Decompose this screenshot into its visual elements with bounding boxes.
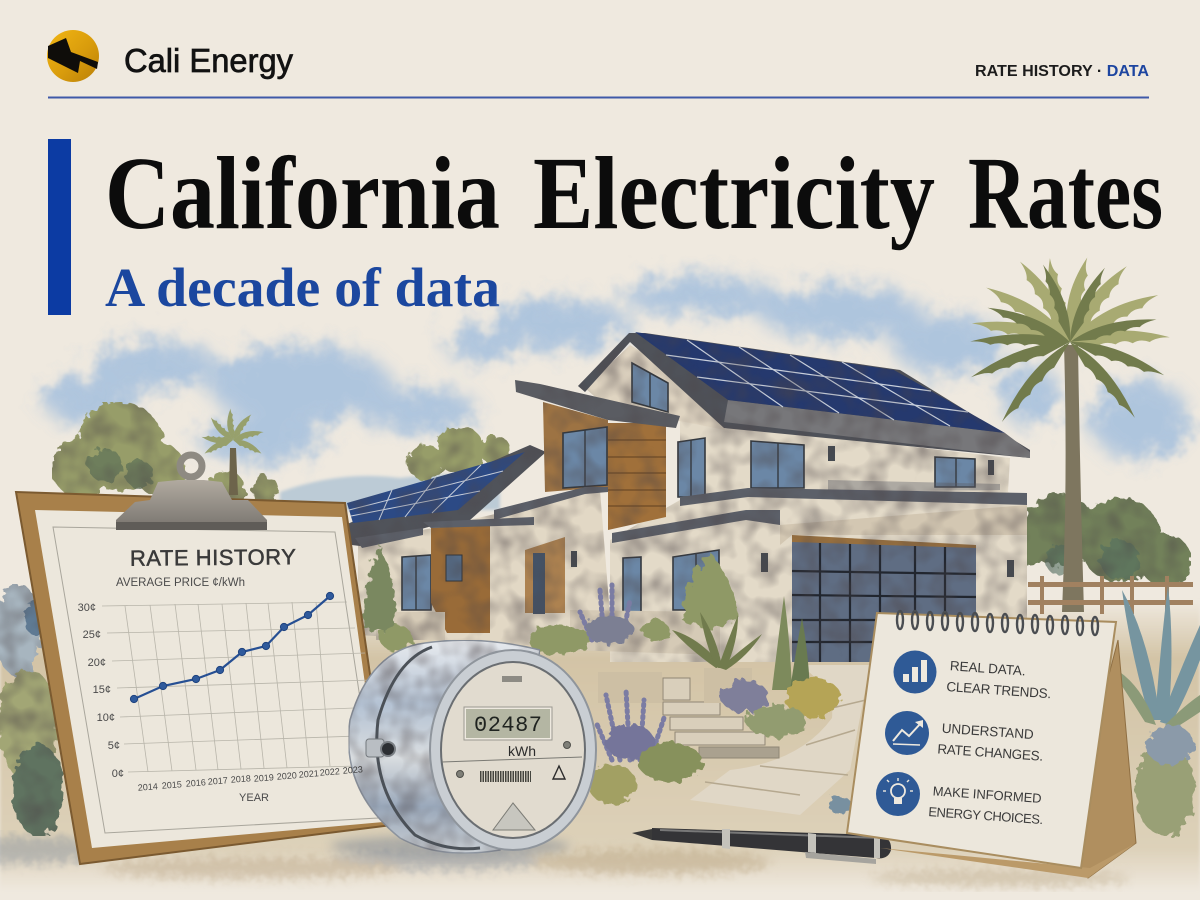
garage door (792, 542, 976, 662)
y axis labels: 15¢ (93, 684, 111, 696)
y axis labels: 25¢ (83, 629, 101, 641)
icon: bar chart (894, 650, 936, 694)
wall shading (780, 505, 1027, 545)
clipboard with chart (16, 455, 396, 864)
garage header (792, 535, 976, 552)
calendar page (847, 613, 1116, 868)
gravel (0, 836, 1130, 886)
window panes (402, 363, 975, 612)
y axis labels: 30¢ (78, 602, 96, 614)
palm tree (969, 256, 1170, 612)
background trees (52, 402, 1191, 586)
line chart (78, 592, 396, 804)
y axis labels: 10¢ (97, 712, 115, 724)
text: informed choices (928, 783, 1045, 827)
small palm tree (201, 408, 264, 495)
electric meter (349, 640, 596, 853)
agave plant (1108, 585, 1200, 730)
chart subtitle: AVERAGE PRICE ¢/kWh (116, 577, 245, 589)
ground shadow (330, 835, 570, 857)
wood tower (608, 423, 666, 530)
x axis labels: 2021 (298, 768, 319, 780)
text: understand: UNDERSTAND (941, 721, 1034, 742)
y axis labels: 0¢ (112, 768, 124, 780)
last year label: 2023 (342, 764, 363, 776)
lcd display (464, 707, 552, 740)
accent bar (48, 139, 71, 315)
left wing roof (345, 445, 546, 546)
subtitle: A decade of data (105, 257, 500, 318)
house (345, 332, 1030, 662)
rate line (134, 596, 330, 699)
title: Electricity (533, 136, 935, 251)
gable wall (585, 345, 725, 430)
title block (48, 136, 1163, 318)
x axis title: YEAR (239, 792, 269, 804)
data points (130, 592, 334, 703)
wall lamps (571, 446, 1014, 577)
meter body (349, 640, 540, 853)
garden plants (364, 545, 852, 813)
desk calendar card (847, 611, 1136, 878)
left wing solar panels (347, 452, 525, 523)
text: real data (946, 658, 1053, 701)
unit label: kWh (508, 743, 536, 759)
x axis labels: 2016 (185, 777, 206, 789)
lower wood cladding (431, 525, 565, 633)
icon: lightning bolt logo (47, 30, 99, 82)
main metal eave (724, 400, 1030, 458)
watercolor sky (42, 276, 1190, 462)
calendar base (880, 843, 1136, 878)
right shrubs (1135, 725, 1195, 836)
warning triangle (553, 766, 565, 779)
bottom seal (493, 803, 535, 830)
planters (598, 668, 752, 703)
left wing walls (358, 490, 612, 650)
x axis labels: 2020 (276, 770, 297, 782)
y axis labels: 20¢ (88, 657, 106, 669)
screws (456, 742, 570, 778)
meter rim (377, 647, 480, 849)
upper wood cladding (543, 402, 608, 492)
x axis labels: 2018 (230, 773, 251, 785)
meter face (441, 662, 585, 838)
pen (632, 828, 891, 864)
text: understand (937, 720, 1045, 764)
side latch (366, 739, 395, 757)
chart title: RATE HISTORY (130, 544, 296, 571)
nameplate (502, 676, 522, 682)
text: understand: RATE CHANGES. (937, 741, 1044, 764)
spiral rings (897, 611, 1098, 635)
metal clip (116, 455, 267, 530)
x axis labels: 2022 (319, 766, 340, 778)
icon: trend arrow (885, 711, 929, 755)
title: California (105, 136, 500, 251)
x axis labels: 2014 (137, 781, 158, 793)
y axis labels: 5¢ (108, 740, 120, 752)
palm trunk (1062, 345, 1084, 612)
clipboard board (16, 492, 392, 864)
cypress spikes (772, 596, 810, 690)
palm fronds (969, 256, 1170, 427)
ground (0, 600, 1200, 892)
stairs (663, 678, 779, 758)
paper inner border (53, 527, 378, 833)
section tag: RATE HISTORY · DATA (975, 63, 1149, 80)
paper sheet (35, 510, 384, 848)
cone shrubs (364, 545, 736, 655)
fence (1028, 576, 1193, 614)
x axis labels: 2019 (253, 772, 274, 784)
text: real data: REAL DATA. (949, 658, 1026, 678)
spiky agave (672, 612, 762, 670)
text: informed choices: MAKE INFORMED (932, 783, 1042, 806)
garden path (690, 665, 870, 815)
low garden walls (376, 610, 720, 655)
brand name: Cali Energy (124, 42, 293, 79)
x axis labels: 2015 (161, 779, 182, 791)
distant hills (280, 474, 500, 510)
x axis labels (137, 766, 340, 793)
left shrubs (0, 584, 64, 836)
title (105, 136, 1163, 251)
canopy roof (515, 380, 680, 428)
main roof (578, 333, 1030, 458)
window mullions (416, 373, 956, 610)
fascia bands (355, 480, 1027, 548)
y axis labels (78, 602, 124, 780)
text: informed choices: ENERGY CHOICES. (928, 804, 1044, 827)
lavender (580, 585, 665, 760)
main wall (610, 420, 1027, 662)
header (47, 30, 1149, 98)
text: real data: CLEAR TRENDS. (946, 679, 1052, 701)
icon: light bulb (876, 772, 920, 816)
main solar panels (635, 332, 1005, 433)
calendar stand (1066, 640, 1136, 878)
x axis labels: 2017 (207, 775, 228, 787)
lcd display: 02487 (474, 713, 542, 738)
barcode (480, 771, 531, 782)
